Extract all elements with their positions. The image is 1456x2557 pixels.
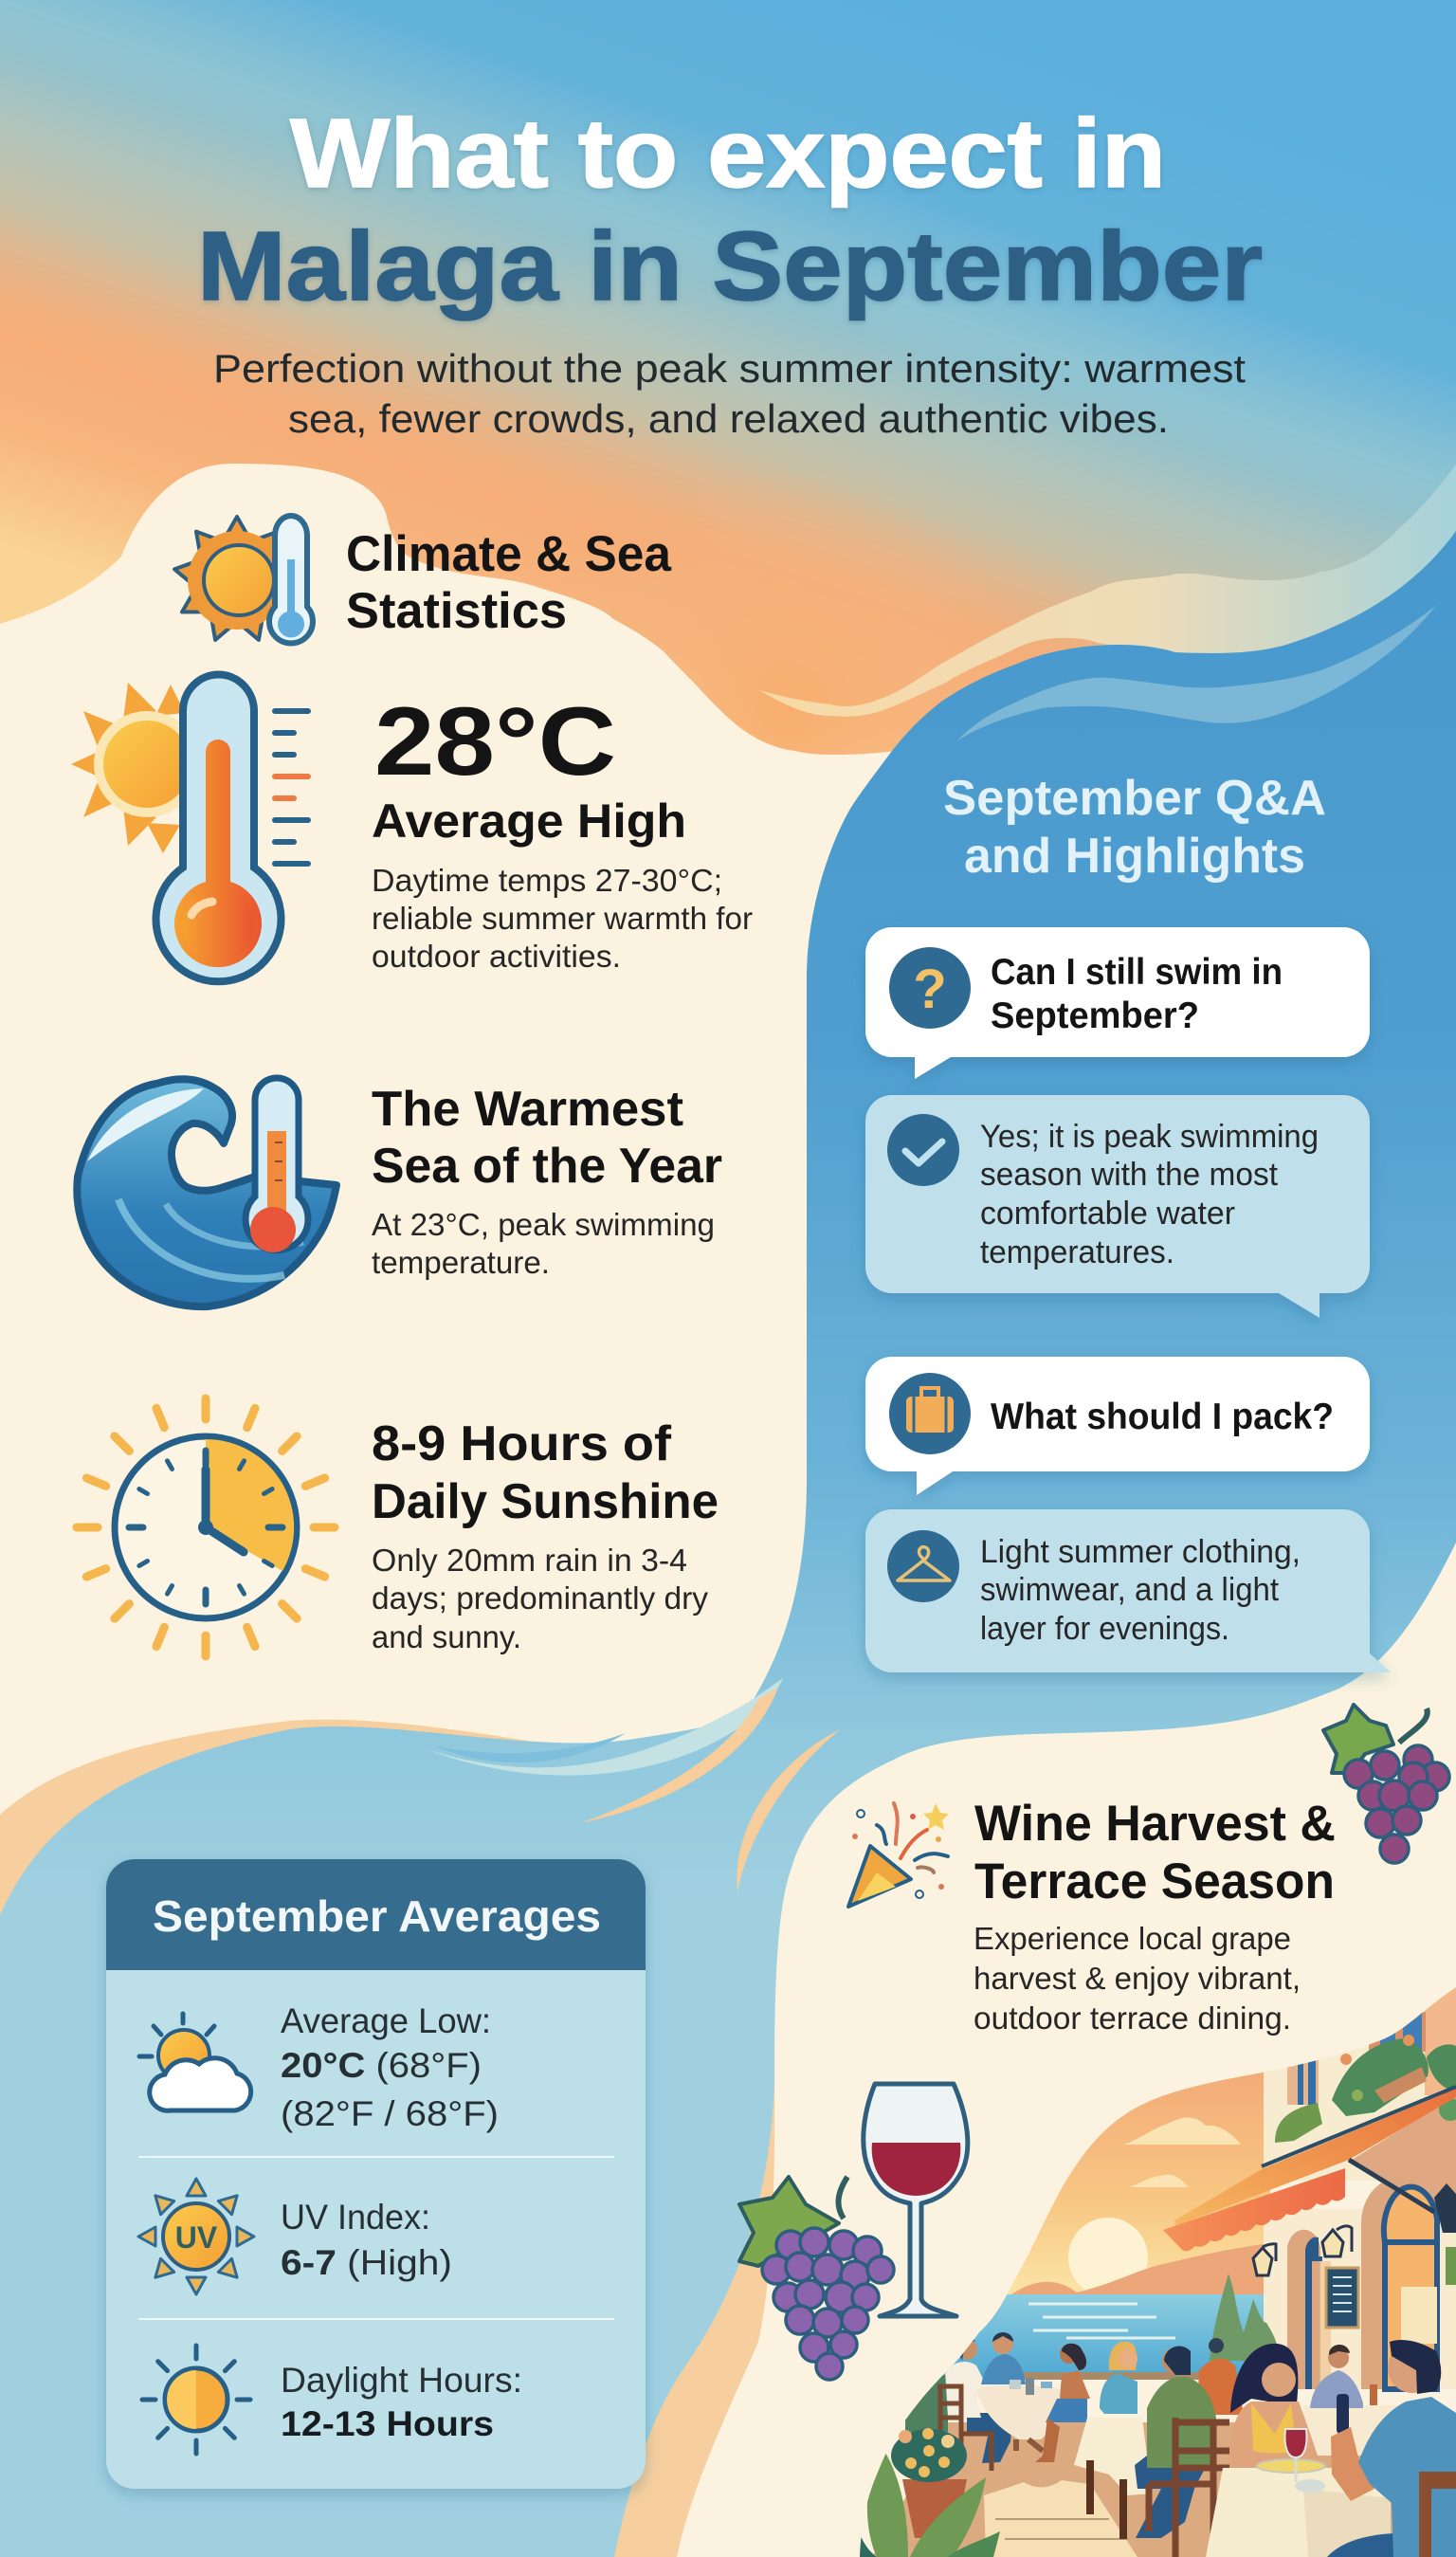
- description: rainfall: and sunny.: [372, 1619, 521, 1654]
- answer bubble: swim: [865, 1095, 1370, 1318]
- icon: question mark: [889, 947, 971, 1029]
- description: wine harvest: [974, 1921, 1301, 2036]
- text: daylight hours: 12-13 Hours: [281, 2404, 494, 2443]
- section: climate heading: [173, 516, 672, 644]
- foreground table: [1206, 2394, 1391, 2557]
- heading: wine harvest: [974, 1796, 1336, 1909]
- sea: [910, 2294, 1270, 2380]
- man in orange shirt: [1197, 2338, 1244, 2415]
- light blue lower panel: [0, 1697, 1456, 2557]
- answer text: season with the most: [980, 1157, 1279, 1193]
- round table: [976, 2378, 1069, 2451]
- description: rainfall: days; predominantly dry: [372, 1580, 708, 1616]
- upper building wall with windows and plants: [1264, 1982, 1456, 2181]
- card: September averages: [106, 1859, 646, 2489]
- title: Malaga in September: [197, 211, 1263, 320]
- answer text: swimwear, and a light: [980, 1572, 1280, 1608]
- foreground leaves: [860, 2454, 1000, 2557]
- peach wave band lower left: [0, 1720, 607, 1991]
- question bubble: pack: [865, 1357, 1370, 1495]
- man in blue shirt foreground: [1327, 2340, 1456, 2557]
- man in green shirt: [1135, 2347, 1216, 2538]
- answer text: [980, 1534, 1301, 1647]
- decorative streaks: [427, 1678, 841, 1892]
- hills: [1011, 2244, 1264, 2294]
- row: daylight hours: [142, 2346, 522, 2454]
- answer text: temperatures.: [980, 1234, 1174, 1270]
- question text: Can I still swim in: [991, 952, 1283, 993]
- card header: [106, 1859, 646, 1970]
- heading: sunshine hours: Daily Sunshine: [372, 1474, 719, 1529]
- blue panel: Q&A background: [749, 531, 1456, 1849]
- back table with man in lavender: [1303, 2345, 1403, 2456]
- description: daytime temps: [372, 863, 753, 974]
- text: UV index: UV Index:: [281, 2198, 430, 2237]
- answer text: Light summer clothing,: [980, 1534, 1301, 1570]
- description: wine harvest: harvest & enjoy vibrant,: [974, 1961, 1301, 1996]
- label: average high: Average High: [372, 794, 686, 848]
- heading: sunshine hours: 8-9 Hours of: [372, 1416, 672, 1471]
- row: UV index: [138, 2179, 452, 2294]
- icon: grapes by the glass: [739, 2177, 894, 2380]
- value: 28 degrees: 28°C: [374, 687, 616, 795]
- man in blue shirt: [981, 2332, 1026, 2384]
- text: UV index: 6-7 (High): [281, 2243, 452, 2282]
- description: sea temperature: At 23°C, peak swimming: [372, 1207, 715, 1242]
- awning: [1163, 2087, 1456, 2251]
- heading: wine harvest: Terrace Season: [974, 1854, 1335, 1909]
- chair behind man: [937, 2386, 992, 2471]
- title: What to expect in: [290, 99, 1166, 208]
- icon: question mark: ?: [913, 959, 947, 1020]
- trees: [1210, 2274, 1279, 2361]
- icon: sun and cloud: [139, 2014, 251, 2110]
- text: UV index: [281, 2198, 452, 2282]
- heading: Q&A: [943, 771, 1326, 884]
- heading: Q&A: September Q&A: [943, 771, 1326, 826]
- floor: [874, 2422, 1393, 2557]
- answer bubble: pack: [865, 1509, 1391, 1672]
- text: average low: Average Low:: [281, 2001, 491, 2040]
- cream panel: wine harvest background: [677, 1543, 1456, 2557]
- icon: UV sun: UV: [175, 2220, 218, 2255]
- section: wine harvest and terrace season: [739, 1705, 1456, 2557]
- question bubble: swim: [865, 927, 1370, 1079]
- icon: check mark: [887, 1114, 959, 1186]
- title: [197, 99, 1263, 320]
- section: September Q&A and highlights: [865, 771, 1391, 1672]
- decorative wave in blue panel: [956, 605, 1436, 741]
- icon: UV sun: [138, 2179, 254, 2294]
- card header: September Averages: [153, 1891, 601, 1941]
- icon: hanger: [887, 1530, 959, 1602]
- wooden chair: [1149, 2418, 1229, 2557]
- icon: wave and thermometer: [77, 1078, 337, 1306]
- heading: climate and sea statistics: Statistics: [346, 583, 567, 639]
- peach band lower right: [614, 2086, 787, 2557]
- decorative pale wave band: [759, 465, 1456, 717]
- icon: sun behind thermometer: [71, 674, 308, 981]
- plants against wall: [905, 2375, 948, 2432]
- icon: wine glass: [864, 2084, 968, 2316]
- description: rainfall: [372, 1543, 708, 1654]
- heading: warmest sea: [372, 1082, 722, 1194]
- question text: What should I pack?: [991, 1397, 1334, 1437]
- man in white shirt: [945, 2338, 1010, 2463]
- page background gradient: [0, 0, 1456, 948]
- question text: September?: [991, 995, 1199, 1036]
- subtitle: Perfection without the peak summer intensity: warmest: [213, 346, 1246, 391]
- stat: warmest sea of the year: [77, 1078, 722, 1306]
- heading: wine harvest: Wine Harvest &: [974, 1796, 1336, 1852]
- heading: warmest sea: Sea of the Year: [372, 1139, 722, 1194]
- subtitle: sea, fewer crowds, and relaxed authentic vibes.: [288, 396, 1169, 441]
- text: average low: (82°F / 68°F): [281, 2094, 499, 2133]
- row: average low: [139, 2001, 499, 2133]
- description: daytime temps: Daytime temps 27-30°C;: [372, 863, 722, 898]
- icon: sun and thermometer: [173, 516, 313, 644]
- answer text: Yes; it is peak swimming: [980, 1119, 1319, 1155]
- icon: party popper: [848, 1803, 949, 1907]
- description: daytime temps: reliable summer warmth for: [372, 901, 753, 936]
- description: sea temperature: [372, 1207, 715, 1280]
- subtitle: [213, 346, 1246, 441]
- railing: [1024, 2372, 1199, 2380]
- stat: daily sunshine: [77, 1398, 719, 1656]
- description: rainfall: Only 20mm rain in 3-4: [372, 1543, 687, 1578]
- text: daylight hours: [281, 2361, 522, 2443]
- icon: sunny clock: [77, 1398, 335, 1656]
- stat: 28 degrees average high: [71, 674, 753, 981]
- text: average low: [281, 2001, 499, 2133]
- description: wine harvest: Experience local grape: [974, 1921, 1291, 1956]
- text: average low: 20°C (68°F): [281, 2046, 482, 2085]
- heading: climate and sea statistics: [346, 526, 672, 639]
- potted flowers: [891, 2428, 967, 2538]
- illustration: terrace dining scene: [834, 1982, 1456, 2557]
- square table: [1074, 2418, 1152, 2539]
- description: daytime temps: outdoor activities.: [372, 939, 621, 974]
- question text: [991, 952, 1283, 1036]
- cream panel: climate background: [0, 464, 910, 1896]
- answer text: comfortable water: [980, 1196, 1235, 1232]
- answer text: layer for evenings.: [980, 1611, 1229, 1647]
- heading: climate and sea statistics: Climate & Sea: [346, 526, 672, 582]
- icon: suitcase: [889, 1373, 971, 1454]
- heading: warmest sea: The Warmest: [372, 1082, 683, 1137]
- icon: grapes top right: [1323, 1705, 1449, 1863]
- sky with clouds and sun: [1001, 2071, 1270, 2304]
- heading: Q&A: and Highlights: [964, 829, 1305, 884]
- blonde woman: [1100, 2342, 1138, 2414]
- heading: sunshine hours: [372, 1416, 719, 1529]
- lower building wall and arches: [1253, 2095, 1456, 2389]
- woman in yellow top: [1230, 2344, 1318, 2456]
- woman at round table: [1035, 2344, 1090, 2462]
- description: sea temperature: temperature.: [372, 1245, 550, 1280]
- description: wine harvest: outdoor terrace dining.: [974, 2000, 1291, 2036]
- icon: sun: [142, 2346, 250, 2454]
- text: daylight hours: Daylight Hours:: [281, 2361, 522, 2400]
- answer text: [980, 1119, 1319, 1270]
